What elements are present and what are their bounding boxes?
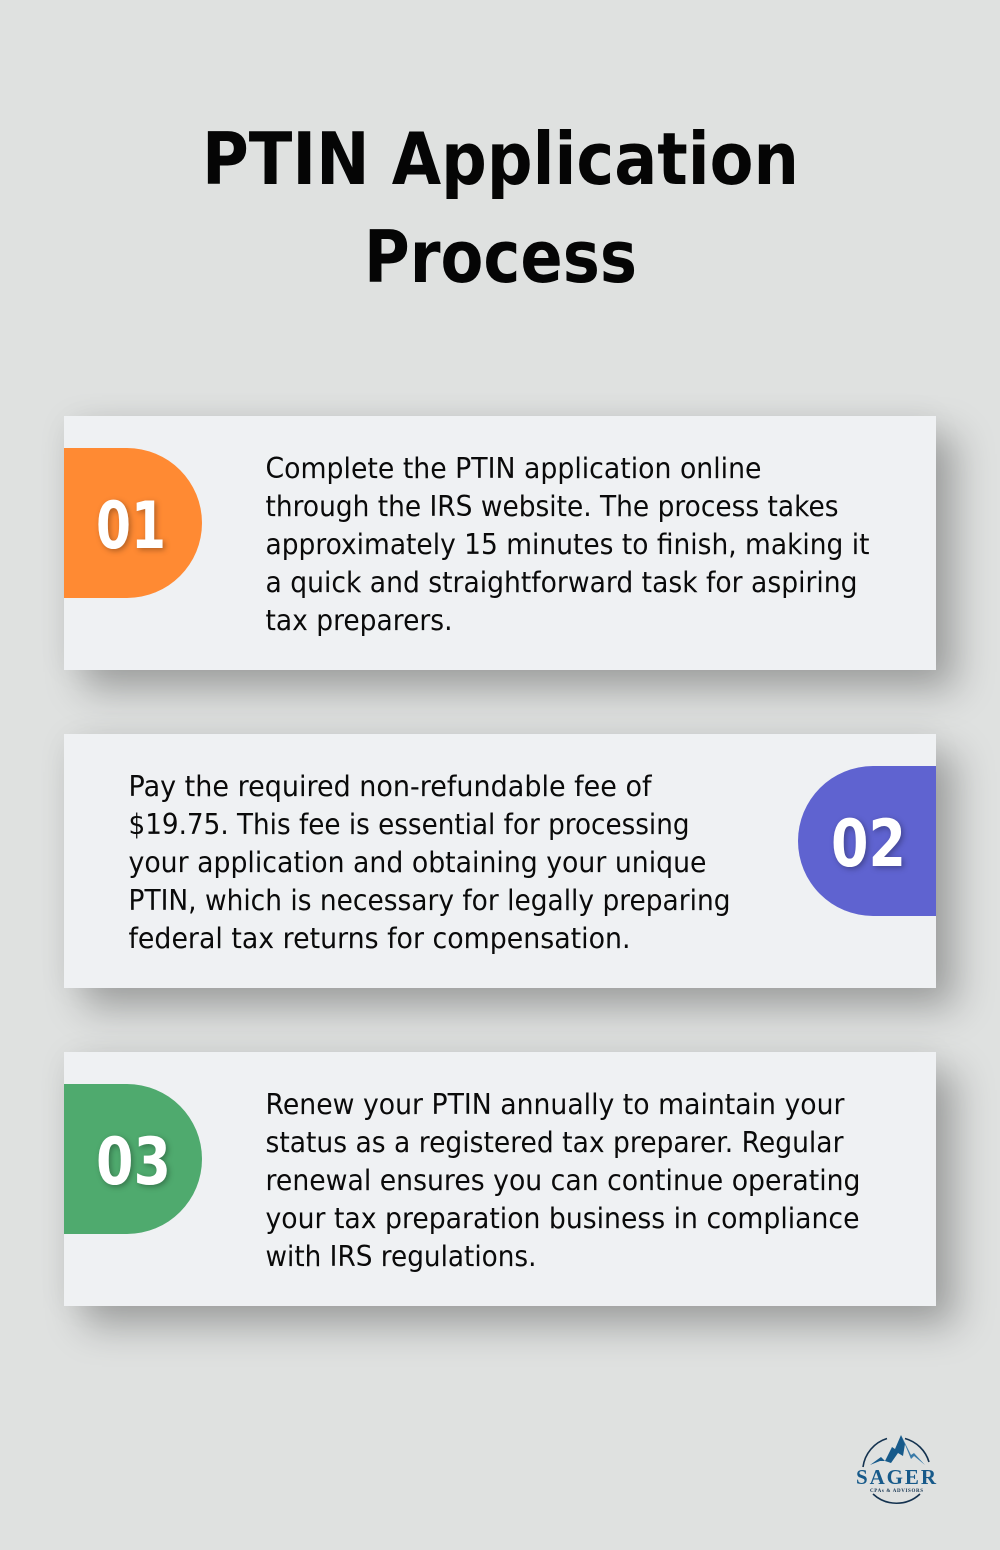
badge: 02 xyxy=(798,766,936,916)
badge: 03 xyxy=(64,1084,202,1234)
text: step 1 description xyxy=(266,452,870,637)
text: step 2 description: your application and obtaining your unique xyxy=(128,846,706,879)
text: step 3 description: renewal ensures you can continue operating xyxy=(266,1164,860,1197)
text: step 3 description: status as a registered tax preparer. Regular xyxy=(266,1126,844,1159)
text: step 2 description xyxy=(128,770,730,955)
text: step 1 description: through the IRS website. The process takes xyxy=(266,490,838,523)
text: step 1 description: Complete the PTIN application online xyxy=(266,452,762,485)
panel: step 1 xyxy=(64,416,936,670)
text: step 3 description: Renew your PTIN annually to maintain your xyxy=(266,1088,845,1121)
logo: Sager CPAs & Advisors: SAGER xyxy=(856,1465,937,1489)
text: step 2 description: PTIN, which is necessary for legally preparing xyxy=(128,884,730,917)
text: step 2 description: Pay the required non-refundable fee of xyxy=(128,770,652,803)
text: step 3 description: with IRS regulations. xyxy=(266,1240,536,1273)
text: step 2 description: federal tax returns for compensation. xyxy=(128,922,630,955)
badge: 02: 02 xyxy=(831,807,906,882)
text: step 2 description: $19.75. This fee is essential for processing xyxy=(128,808,690,841)
logo: Sager CPAs & Advisors: CPAs & ADVISORS xyxy=(870,1489,923,1494)
text: step 3 description xyxy=(266,1088,860,1273)
title: Process xyxy=(364,215,637,299)
panel: step 2 xyxy=(64,734,936,988)
text: step 1 description: approximately 15 minutes to finish, making it xyxy=(266,528,870,561)
text: step 1 description: a quick and straightforward task for aspiring xyxy=(266,566,858,599)
badge: 03: 03 xyxy=(96,1125,171,1200)
text: step 3 description: your tax preparation business in compliance xyxy=(266,1202,860,1235)
badge: 01 xyxy=(64,448,202,598)
panel: step 3 xyxy=(64,1052,936,1306)
title: PTIN Application xyxy=(202,117,799,201)
text: step 1 description: tax preparers. xyxy=(266,604,452,637)
title xyxy=(202,117,799,299)
badge: 01: 01 xyxy=(96,489,166,564)
